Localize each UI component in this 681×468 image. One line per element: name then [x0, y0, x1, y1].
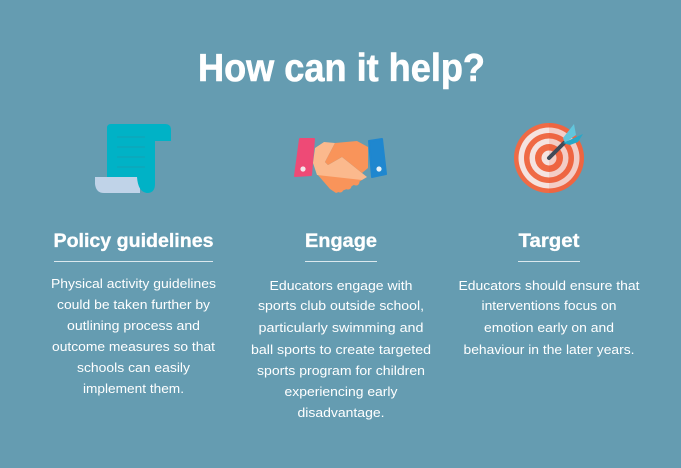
- icon: dartboard: [514, 123, 584, 193]
- text block: engage: sports program for children: [257, 363, 425, 378]
- text block: policy guidelines: schools can easily: [77, 360, 190, 375]
- text block: target: behaviour in the later years.: [464, 342, 634, 357]
- text block: engage: experiencing early: [284, 384, 398, 399]
- text block: policy guidelines: implement them.: [83, 381, 184, 396]
- heading underline: [305, 261, 377, 262]
- text block: target: [458, 278, 640, 357]
- icon: handshake: [295, 139, 386, 193]
- text block: policy guidelines: outcome measures so that: [52, 339, 215, 354]
- text block: policy guidelines: Physical activity guidelines: [51, 276, 216, 291]
- text block: engage: Educators engage with: [270, 278, 412, 293]
- text block: policy guidelines: outlining process and: [67, 318, 200, 333]
- heading underline: [518, 261, 580, 262]
- heading: target: Target: [518, 231, 580, 252]
- icon: scroll: [95, 124, 171, 193]
- panel: target: [458, 123, 640, 357]
- text block: policy guidelines: [51, 276, 216, 396]
- panel: engage: [251, 139, 431, 420]
- heading: policy guidelines: Policy guidelines: [54, 231, 214, 252]
- text block: target: Educators should ensure that: [458, 278, 640, 293]
- panel: policy guidelines: [51, 124, 216, 396]
- text block: engage: particularly swimming and: [258, 320, 424, 335]
- heading underline: [54, 261, 213, 262]
- text block: engage: [251, 278, 431, 420]
- title: How can it help?: [198, 47, 485, 90]
- text block: target: interventions focus on: [482, 298, 616, 313]
- text block: policy guidelines: could be taken further by: [57, 297, 210, 312]
- text block: engage: sports club outside school,: [258, 298, 424, 313]
- text block: engage: disadvantage.: [298, 405, 384, 420]
- heading: engage: Engage: [305, 231, 377, 252]
- text block: target: emotion early on and: [484, 320, 614, 335]
- text block: engage: ball sports to create targeted: [251, 342, 431, 357]
